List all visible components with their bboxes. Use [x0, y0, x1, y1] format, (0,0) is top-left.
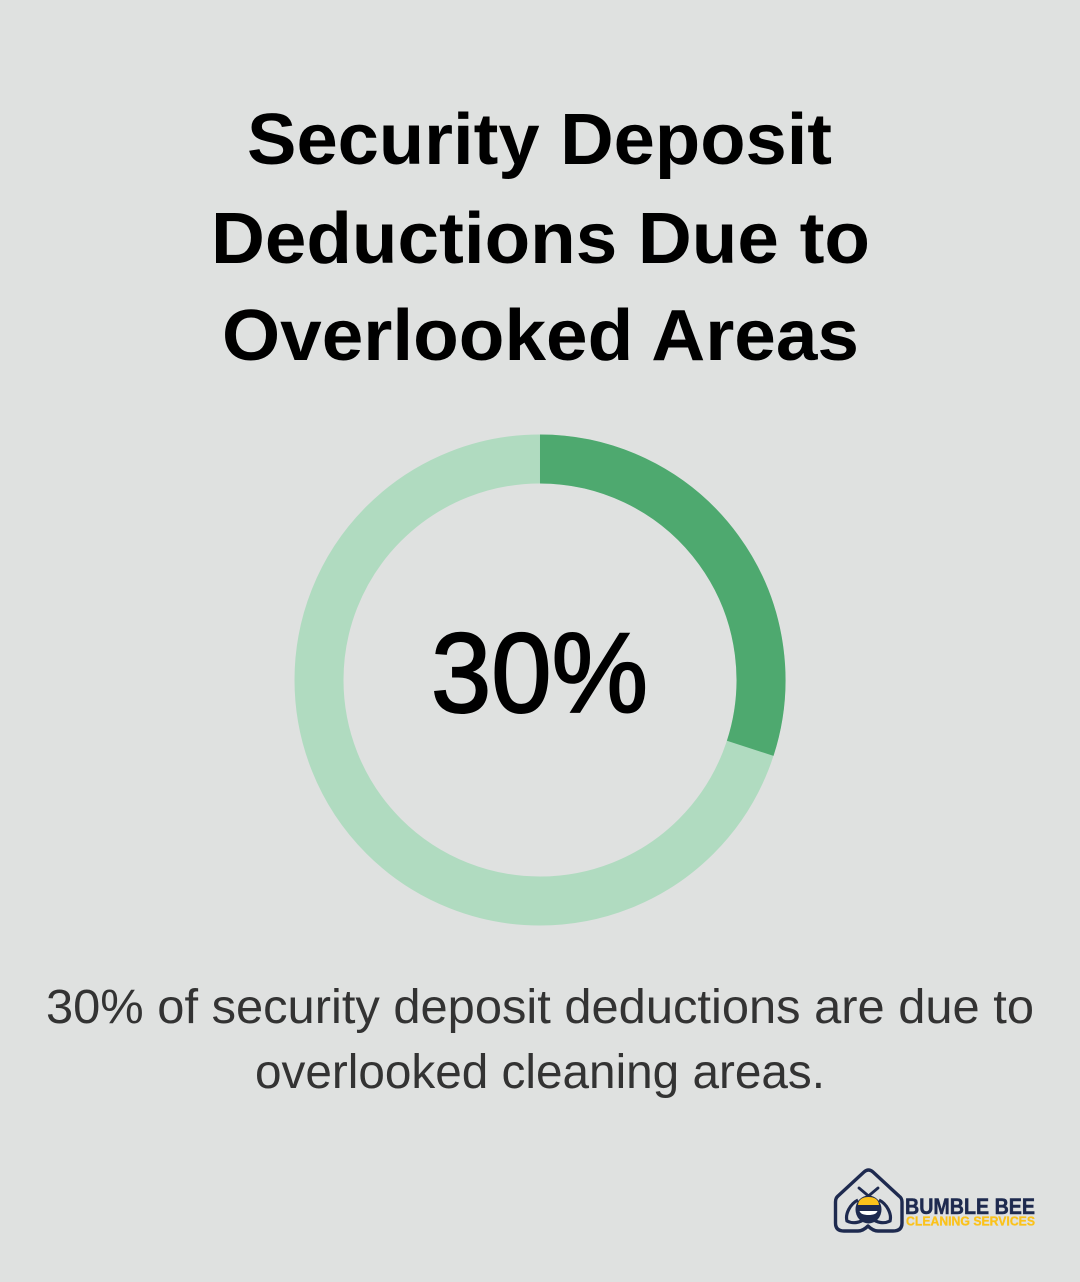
title: Security Deposit	[247, 100, 832, 180]
icon: house with bee	[836, 1170, 902, 1231]
description text: overlooked cleaning areas.	[255, 1046, 825, 1099]
donut chart: 30%	[319, 459, 761, 901]
logo name: BUMBLE BEE	[905, 1194, 1035, 1219]
title: Overlooked Areas	[222, 296, 859, 376]
title	[211, 100, 870, 376]
donut track	[319, 459, 761, 901]
center value: 30%	[431, 610, 648, 736]
logo: Bumble Bee Cleaning Services	[836, 1170, 1035, 1231]
description text	[46, 981, 1034, 1099]
description text: 30% of security deposit deductions are due to	[46, 981, 1034, 1034]
donut segment: 30%	[540, 459, 761, 748]
title: Deductions Due to	[211, 199, 870, 279]
logo tagline: CLEANING SERVICES	[906, 1214, 1035, 1228]
